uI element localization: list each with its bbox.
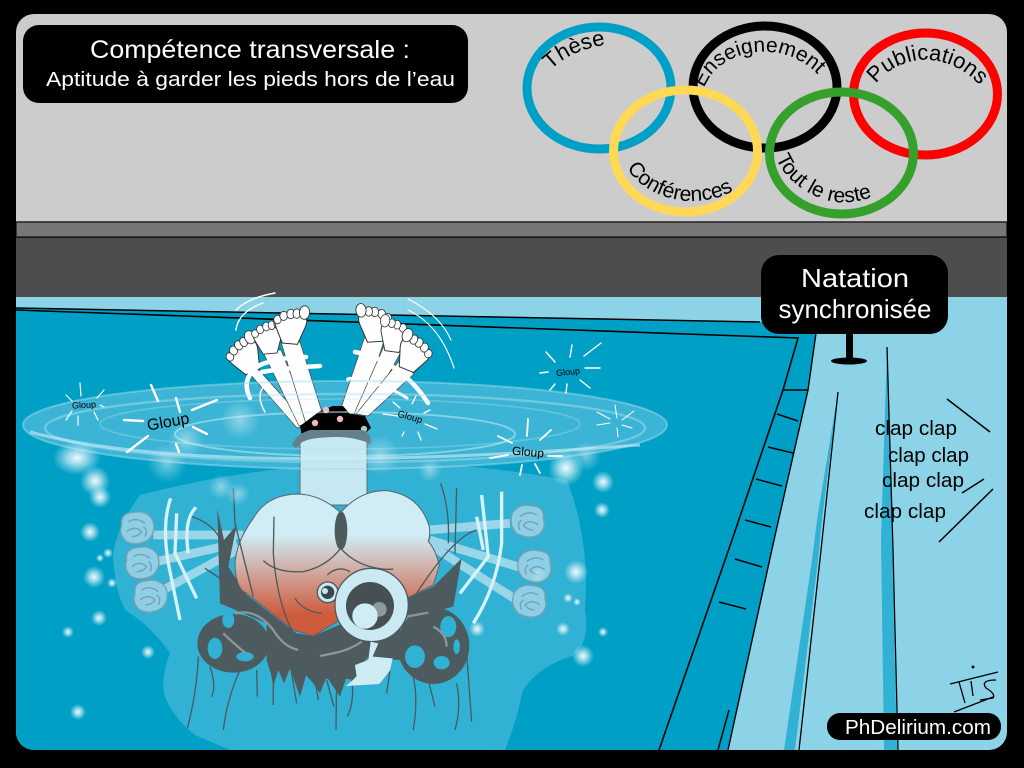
nose and mouth marks — [295, 569, 350, 613]
hair mass — [217, 509, 462, 683]
website label: PhDelirium.com — [845, 717, 991, 739]
wall background — [16, 14, 1007, 222]
applause text: clap clap — [882, 470, 964, 492]
wall ledge — [16, 222, 1007, 237]
collar — [346, 642, 393, 686]
underwater arms — [121, 492, 551, 623]
applause text: clap clap — [864, 501, 946, 523]
swimsuit flowers — [312, 407, 367, 432]
pool deck — [16, 297, 1007, 750]
Gloup bubbles text: Gloup — [72, 399, 96, 411]
applause text — [864, 418, 969, 523]
ring labels — [541, 34, 986, 202]
submerged swimsuit — [292, 430, 371, 448]
ring labels: Conférences — [630, 162, 732, 202]
ring: black — [693, 26, 837, 148]
ring: green — [770, 92, 914, 214]
Gloup bubbles text: Gloup — [396, 409, 424, 426]
sign: Natation synchronisée — [761, 255, 948, 364]
lane lines on deck — [784, 347, 898, 750]
upside-down head and hair — [187, 483, 477, 730]
applause text: clap clap — [875, 418, 957, 440]
fringe spikes — [270, 668, 356, 696]
ripple lines — [23, 381, 667, 469]
title box: Aptitude à garder les pieds hors de l’eau — [46, 69, 455, 91]
head — [235, 491, 439, 636]
applause motion lines — [939, 399, 993, 542]
submerged torso — [300, 436, 367, 505]
feet — [226, 330, 260, 376]
water surface — [23, 381, 667, 469]
sign: Natation synchronisée: Natation — [801, 263, 909, 293]
open mouth — [335, 568, 408, 642]
applause text: clap clap — [888, 445, 969, 467]
Gloup bubbles text: Gloup — [511, 444, 545, 460]
dark wall band — [16, 238, 1007, 297]
signature — [950, 666, 998, 712]
ring labels: Enseignement — [698, 40, 826, 86]
Gloup bubbles text: Gloup — [146, 410, 191, 435]
left legs — [252, 370, 300, 428]
hair curls — [197, 607, 469, 684]
ring: red — [854, 33, 998, 155]
ring labels: Publications — [866, 44, 986, 84]
navel — [335, 511, 347, 550]
underwater body blob — [113, 463, 586, 750]
legs and feet out of the water — [220, 301, 438, 428]
Gloup bubbles text — [72, 366, 580, 460]
title box — [23, 25, 468, 103]
hair strands — [187, 483, 477, 730]
bubbles — [53, 400, 614, 720]
swimsuit — [300, 406, 371, 436]
olympic rings — [527, 26, 998, 214]
cheek outlines — [263, 548, 393, 572]
ring: yellow — [614, 90, 758, 212]
ring: blue — [527, 27, 671, 149]
hair highlights — [223, 612, 447, 656]
sign: Natation synchronisée: synchronisée — [778, 294, 932, 324]
Gloup sparks — [66, 343, 634, 475]
swimming pool — [16, 308, 816, 750]
splash motion lines — [236, 293, 454, 412]
ring labels: Thèse — [541, 34, 604, 66]
eye — [317, 582, 338, 603]
ring labels: Tout le reste — [778, 152, 870, 202]
Gloup bubbles text: Gloup — [556, 366, 580, 378]
website label — [827, 713, 1001, 740]
title box: Compétence transversale : — [90, 36, 410, 64]
right legs — [339, 336, 385, 414]
